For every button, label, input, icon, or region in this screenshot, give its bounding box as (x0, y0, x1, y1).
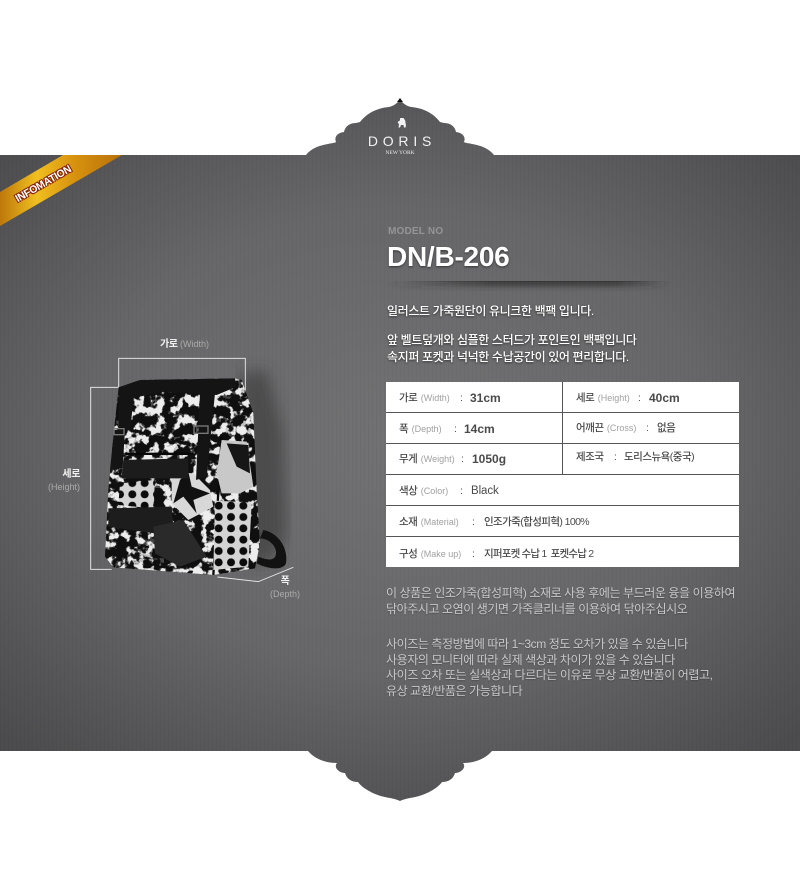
size note: 사용자의 모니터에 따라 실제 색상과 차이가 있을 수 있습니다 (386, 653, 675, 667)
logo: doris new york (368, 118, 436, 156)
spec: depth: : (454, 423, 456, 435)
buckles (114, 426, 208, 435)
ribbon: infomation: INFOMATION (13, 163, 74, 205)
description features: 속지퍼 포켓과 넉넉한 수납공간이 있어 편리합니다. (387, 350, 629, 364)
dot panels (118, 480, 155, 508)
label: height: (Height) (48, 482, 80, 492)
spec: width: : (460, 392, 462, 404)
backpack diagram with dimension lines (90, 358, 294, 582)
spec: color: 색상 (Color) (399, 485, 448, 497)
spec: depth: 14cm (464, 422, 495, 436)
flap and straps (110, 378, 237, 480)
side print portrait (217, 440, 253, 493)
label: depth (270, 576, 300, 599)
description features: 앞 벨트덮개와 심플한 스터드가 포인트인 백팩입니다 (387, 333, 637, 347)
spec: width (399, 391, 501, 405)
logo: doris new york: NEW YORK (385, 150, 415, 156)
spec: cross: 어깨끈 (Cross) (576, 422, 636, 434)
logo: doris new york: DORIS (368, 133, 436, 149)
spec: material: 인조가죽(합성피혁) 100% (484, 516, 589, 528)
label: width: 가로 (Width) (160, 339, 209, 350)
spec: color: : (460, 485, 462, 497)
spec: weight: 무게 (Weight) (399, 453, 455, 465)
background panel with scalloped crest (0, 98, 800, 801)
ribbon: infomation (0, 155, 122, 226)
spec: height: 40cm (649, 391, 680, 405)
backpack drop shadow (240, 370, 287, 563)
size note: 사이즈는 측정방법에 따라 1~3cm 정도 오차가 있을 수 있습니다 (386, 637, 688, 651)
label: height (48, 468, 80, 492)
flag print (172, 472, 213, 520)
spec: height: 세로 (Height) (576, 392, 630, 404)
model title: DN/B-206 (387, 241, 509, 272)
spec: cross (576, 422, 676, 434)
spec: depth: 폭 (Depth) (399, 423, 442, 435)
size note (386, 637, 713, 698)
spec: depth (399, 422, 495, 436)
spec: weight: 1050g (472, 452, 506, 466)
label: depth: 폭 (281, 576, 289, 587)
model no: MODEL NO (388, 226, 443, 237)
spec: make up: 구성 (Make up) (399, 548, 461, 560)
care note: 닦아주시고 오염이 생기면 가죽클리너를 이용하여 닦아주십시오 (386, 602, 687, 616)
description features (386, 333, 637, 364)
spec: make up: 지퍼포켓 수납 1 포켓수납 2 (484, 548, 593, 560)
spec: width: 31cm (470, 391, 501, 405)
spec: cross: 없음 (657, 422, 675, 434)
studded pocket band (122, 458, 188, 478)
spec: origin: 제조국 (576, 451, 603, 463)
size note: 사이즈 오차 또는 실색상과 다르다는 이유로 무상 교환/반품이 어렵고, (386, 668, 713, 682)
size note: 유상 교환/반품은 가능합니다 (386, 684, 522, 698)
care note: 이 상품은 인조가죽(합성피혁) 소재로 사용 후에는 부드러운 융을 이용하여 (386, 586, 735, 600)
spec: weight (399, 452, 506, 466)
shoulder strap (257, 530, 286, 568)
icon: poodle (398, 118, 406, 128)
spec: material: 소재 (Material) (399, 516, 459, 528)
spec: origin (576, 451, 694, 463)
label: height: 세로 (62, 469, 80, 480)
spec: height: : (638, 392, 640, 404)
spec: height (576, 391, 680, 405)
spec: cross: : (646, 422, 648, 434)
spec: material: : (472, 516, 474, 528)
spec: color: Black (471, 485, 499, 497)
spec: make up: : (472, 548, 474, 560)
spec: origin: : (614, 451, 616, 463)
spec table (386, 382, 739, 567)
spec: origin: 도리스뉴욕(중국) (624, 451, 694, 463)
care note (386, 586, 735, 616)
spec: material (399, 516, 590, 528)
spec: make up (399, 548, 594, 560)
description: 일러스트 가죽원단이 유니크한 백팩 입니다. (387, 304, 594, 318)
label: depth: (Depth) (270, 589, 300, 599)
bag body with print (103, 377, 263, 577)
side panel edge (213, 437, 222, 575)
spec: width: 가로 (Width) (399, 392, 450, 404)
spec: weight: : (461, 453, 463, 465)
spec: color (399, 485, 499, 497)
dimension lines (91, 358, 293, 582)
